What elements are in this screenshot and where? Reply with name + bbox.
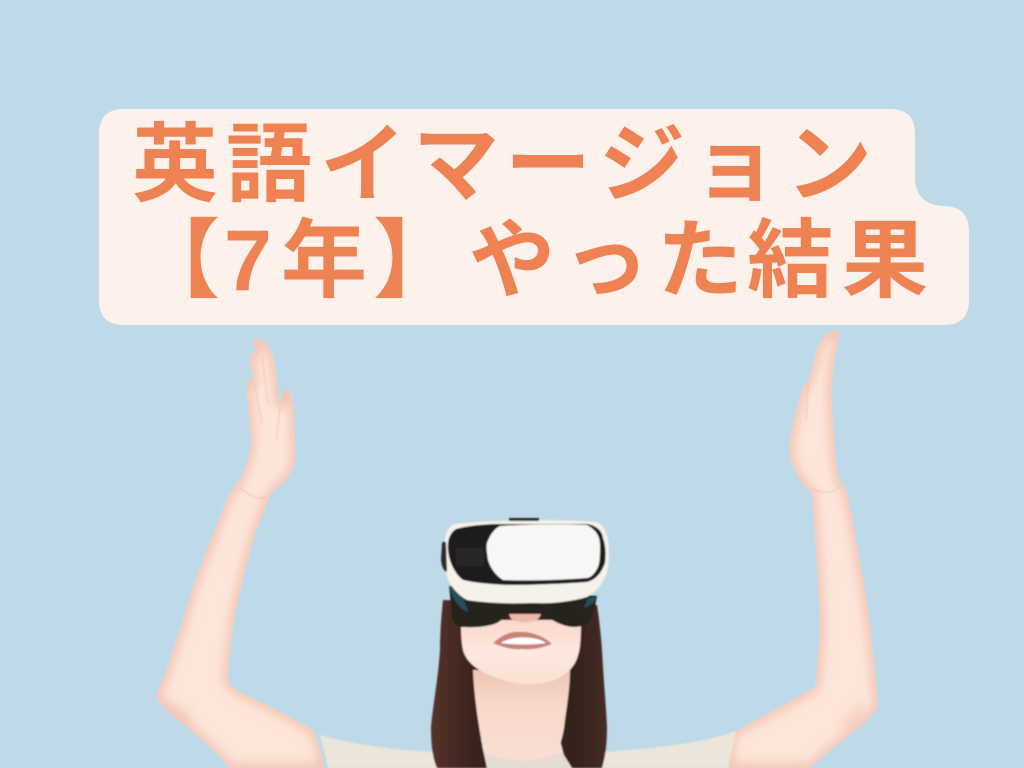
title line 1: 英語イマージョン <box>132 117 872 213</box>
shirt collar <box>484 752 572 768</box>
woman with VR headset <box>320 518 736 768</box>
headset side button <box>441 542 447 572</box>
headset shell <box>444 520 609 603</box>
infographic canvas <box>99 109 969 768</box>
title line 2: 【7年】やった結果 <box>134 213 928 309</box>
headset underside <box>449 586 597 627</box>
headset white panel <box>487 524 600 580</box>
earring <box>458 656 464 660</box>
headset dark front <box>448 524 606 585</box>
shirt <box>320 731 736 768</box>
title panel <box>99 109 969 325</box>
nose <box>509 612 541 622</box>
speaker grille <box>456 548 484 566</box>
left arm <box>157 338 324 768</box>
teeth <box>501 637 546 644</box>
hair <box>431 600 607 768</box>
neck <box>473 670 570 760</box>
right arm <box>728 330 878 768</box>
headset top button <box>509 518 539 521</box>
face <box>461 620 581 684</box>
mouth <box>493 632 552 649</box>
